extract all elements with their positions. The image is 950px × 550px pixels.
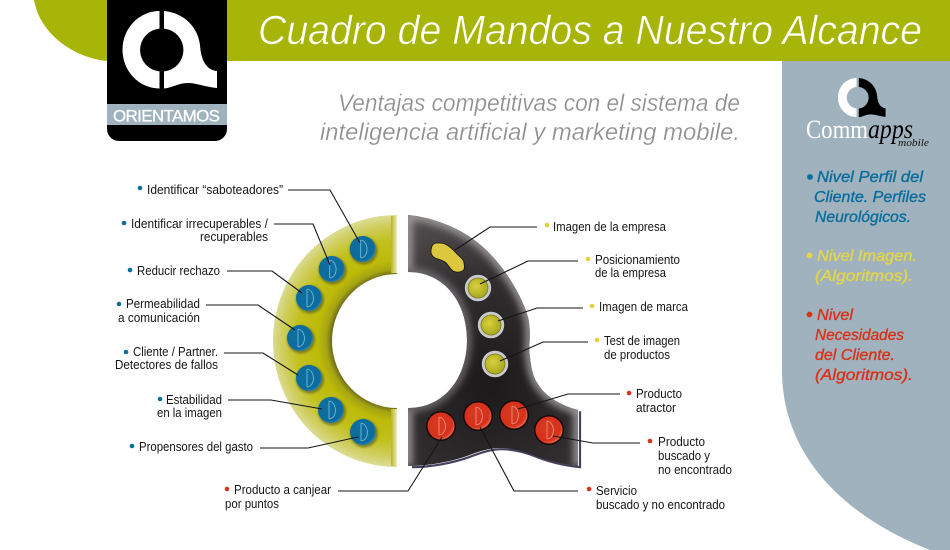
logo: Orientamos xyxy=(107,0,227,141)
label: Identificar saboteadores xyxy=(138,183,360,243)
legend: blue level xyxy=(808,169,926,226)
legend: red level: Necesidades xyxy=(815,327,904,344)
label: Test de imagen xyxy=(500,334,680,362)
label: Cliente / Partner: Cliente / Partner. xyxy=(133,345,218,359)
label: Cliente / Partner: Detectores de fallos xyxy=(115,358,218,372)
legend: yellow level xyxy=(807,248,917,285)
logo: Commapps mobile: Comm xyxy=(806,115,868,144)
label: Permeabilidad xyxy=(117,297,295,330)
label: Reducir rechazo xyxy=(128,264,302,293)
subtitle: inteligencia artificial y marketing mobile. xyxy=(320,119,740,146)
label: Servicio: buscado y no encontrado xyxy=(596,498,725,512)
label: Permeabilidad: a comunicación xyxy=(118,311,200,325)
legend: blue level: Neurológicos. xyxy=(815,209,911,226)
legend: blue level: Cliente. Perfiles xyxy=(814,189,926,206)
label: Producto buscado: Producto xyxy=(658,435,705,449)
legend: red level: del Cliente. xyxy=(815,347,895,364)
label: Producto atractor xyxy=(518,387,682,415)
panel: dark half wheel xyxy=(408,215,580,467)
label: Test de imagen: Test de imagen xyxy=(604,334,680,348)
label: Permeabilidad: Permeabilidad xyxy=(126,297,200,311)
yellow bean button xyxy=(431,243,464,272)
legend: blue level: Nivel Perfil del xyxy=(817,169,924,186)
label: Producto atractor: Producto xyxy=(636,387,682,401)
label: Servicio: Servicio xyxy=(596,484,637,498)
legend: red level xyxy=(807,307,913,384)
label: Producto a canjear: Producto a canjear xyxy=(234,483,331,497)
label: Posicionamiento: Posicionamiento xyxy=(595,253,680,267)
label: Identificar irrecuperables: recuperables xyxy=(200,230,268,244)
label: Producto buscado: no encontrado xyxy=(658,463,732,477)
label: Producto a canjear: por puntos xyxy=(225,497,279,511)
legend: yellow level: Nivel Imagen. xyxy=(817,248,917,265)
logo: Commapps mobile: mobile xyxy=(898,137,929,149)
logo: Commapps mobile: apps xyxy=(868,114,913,144)
label: Imagen de marca: Imagen de marca xyxy=(599,300,688,314)
subtitle xyxy=(320,90,740,146)
label: Propensores del gasto xyxy=(130,437,358,454)
label: Imagen de marca xyxy=(498,300,688,321)
label: Cliente / Partner xyxy=(115,345,298,375)
legend: red level: (Algoritmos). xyxy=(815,367,913,384)
red buttons xyxy=(426,400,564,445)
label: Producto buscado xyxy=(553,435,732,477)
legend: red level: Nivel xyxy=(817,307,854,324)
label: Estabilidad xyxy=(157,393,322,420)
logo: Orientamos: ORIENTAMOS xyxy=(113,106,220,126)
label: Posicionamiento: de la empresa xyxy=(595,266,666,280)
label: Servicio xyxy=(480,427,725,512)
header band xyxy=(34,0,950,61)
title: Cuadro de Mandos a Nuestro Alcance xyxy=(258,7,922,53)
yellow ring buttons xyxy=(464,274,508,378)
panel: side column xyxy=(782,61,950,550)
label: Test de imagen: de productos xyxy=(604,348,670,362)
panel: yellow half wheel xyxy=(273,215,397,467)
label: Imagen de la empresa xyxy=(455,220,666,250)
label: Identificar saboteadores: Identificar “saboteadores” xyxy=(147,183,283,197)
label: Estabilidad: en la imagen xyxy=(157,406,222,420)
label: Posicionamiento xyxy=(480,253,680,284)
legend: yellow level: (Algoritmos). xyxy=(815,268,913,285)
label: Reducir rechazo: Reducir rechazo xyxy=(137,264,220,278)
subtitle: Ventajas competitivas con el sistema de xyxy=(338,90,740,117)
blue buttons xyxy=(287,236,378,448)
label: Identificar irrecuperables: Identificar irrecuperables / xyxy=(131,217,268,231)
label: Imagen de la empresa: Imagen de la empresa xyxy=(553,220,666,234)
label: Producto a canjear xyxy=(225,437,442,511)
label: Producto buscado: buscado y xyxy=(658,449,711,463)
label: Identificar irrecuperables xyxy=(122,217,330,265)
label: Propensores del gasto: Propensores del gasto xyxy=(139,440,253,454)
logo: Commapps mobile xyxy=(806,78,929,149)
label: Producto atractor: atractor xyxy=(636,401,676,415)
label: Estabilidad: Estabilidad xyxy=(166,393,222,407)
